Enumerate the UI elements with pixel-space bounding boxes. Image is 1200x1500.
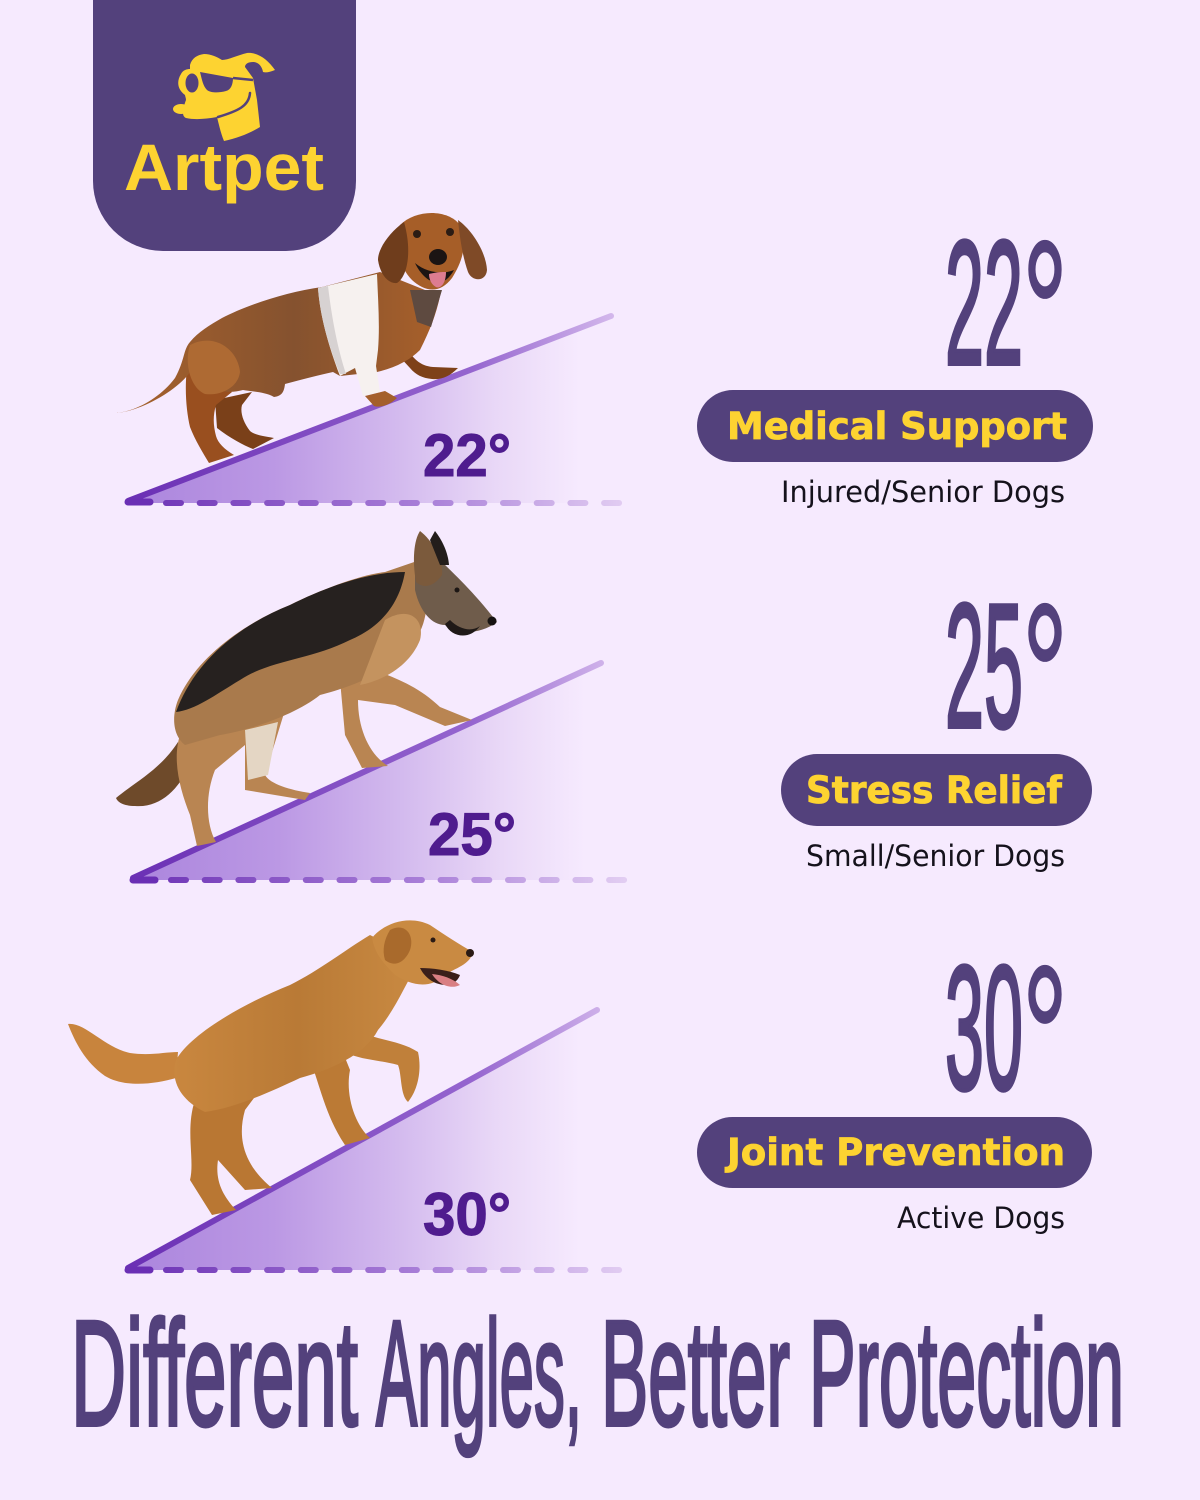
ear — [384, 928, 411, 964]
head — [372, 920, 473, 984]
section: 25 degrees — [781, 562, 1092, 873]
ear left — [378, 222, 408, 283]
far rear leg — [215, 392, 274, 449]
title: Angles, — [376, 1289, 582, 1457]
angle label 22: 22° — [423, 422, 511, 489]
rear legs — [190, 1080, 272, 1215]
ear right — [458, 220, 487, 279]
title: Different — [71, 1289, 358, 1457]
section: 22 degrees — [697, 199, 1093, 509]
big number 25 — [945, 562, 1068, 791]
angle label 30: 30° — [423, 1181, 511, 1248]
tail — [68, 1024, 178, 1084]
pill: joint prevention — [697, 1117, 1092, 1188]
pill: joint prevention: Joint Prevention — [724, 1131, 1065, 1174]
head — [415, 552, 497, 632]
logo panel — [93, 0, 356, 251]
big number 30 — [945, 924, 1068, 1153]
angle label 25: 25° — [428, 801, 516, 868]
body — [174, 560, 427, 745]
big number 22: ° — [1022, 199, 1068, 428]
pill: stress relief — [781, 754, 1092, 826]
near leg highlight — [245, 722, 278, 780]
title — [71, 1289, 1124, 1457]
big number 30: ° — [1022, 924, 1068, 1153]
bandage body — [318, 274, 380, 396]
big number 30: 30 — [945, 929, 1023, 1127]
big number 22: 22 — [945, 204, 1023, 402]
ramp: 22 degrees — [125, 316, 620, 503]
rear legs — [177, 690, 310, 846]
head — [397, 213, 464, 290]
pill: medical support — [697, 390, 1093, 462]
dog: german shepherd — [116, 531, 497, 846]
logo wordmark: Artpet — [124, 130, 324, 204]
pill: medical support: Medical Support — [727, 405, 1067, 448]
pill: stress relief: Stress Relief — [806, 769, 1063, 812]
ramp: 25 degrees — [130, 663, 625, 880]
mouth — [420, 968, 460, 985]
dog: golden retriever — [68, 920, 474, 1215]
neck dark — [410, 290, 442, 327]
haunch highlight — [188, 341, 240, 394]
muzzle — [445, 620, 480, 636]
caption: active dogs: Active Dogs — [897, 1201, 1065, 1235]
tail — [116, 742, 190, 806]
icon: dog with sunglasses — [173, 53, 275, 141]
section: 30 degrees — [697, 924, 1092, 1235]
big number 22 — [945, 199, 1068, 428]
far front leg — [398, 345, 458, 379]
ramp: 30 degrees — [125, 1010, 620, 1270]
bandage shade — [318, 286, 346, 374]
ears — [414, 531, 442, 586]
front paw — [365, 391, 397, 407]
near rear leg — [186, 360, 234, 463]
big number 25: 25 — [945, 567, 1023, 765]
body and tail — [115, 272, 440, 413]
caption: small/senior dogs: Small/Senior Dogs — [806, 839, 1065, 873]
title: Better — [601, 1289, 790, 1457]
raised front leg — [345, 1030, 420, 1102]
body — [174, 935, 420, 1112]
face — [413, 228, 454, 287]
caption: injured/senior dogs: Injured/Senior Dogs — [781, 475, 1065, 509]
standing front leg — [310, 1045, 370, 1145]
big number 25: ° — [1022, 562, 1068, 791]
black saddle — [176, 572, 405, 712]
front legs — [340, 650, 472, 768]
dog: dachshund with bandage — [115, 213, 487, 463]
chest mane — [360, 614, 421, 685]
